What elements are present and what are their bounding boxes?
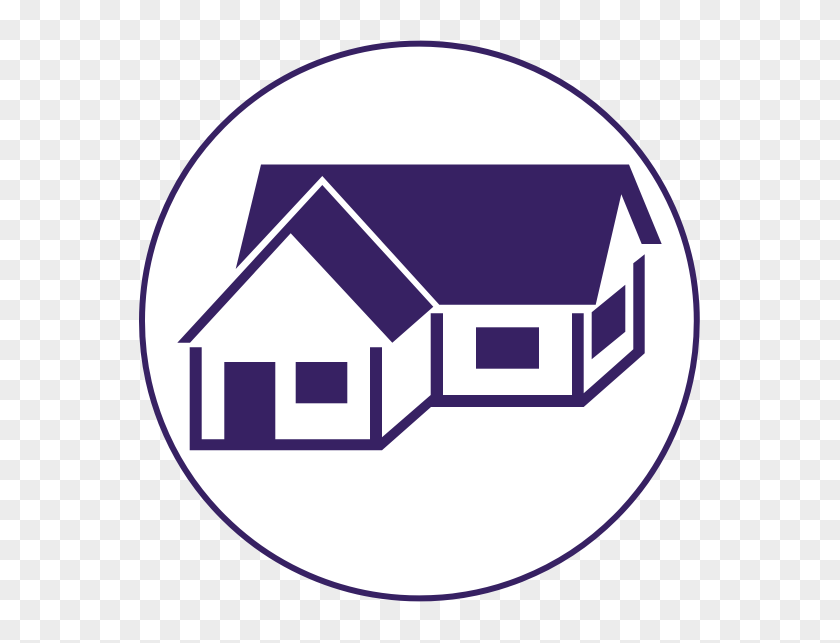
back roof — [236, 164, 662, 305]
middle window — [476, 327, 539, 369]
icon: house — [177, 164, 662, 450]
side window — [592, 285, 625, 359]
front gable roof — [177, 185, 433, 343]
front window — [296, 362, 347, 403]
house walls outline — [190, 254, 645, 450]
circle badge — [142, 44, 697, 598]
